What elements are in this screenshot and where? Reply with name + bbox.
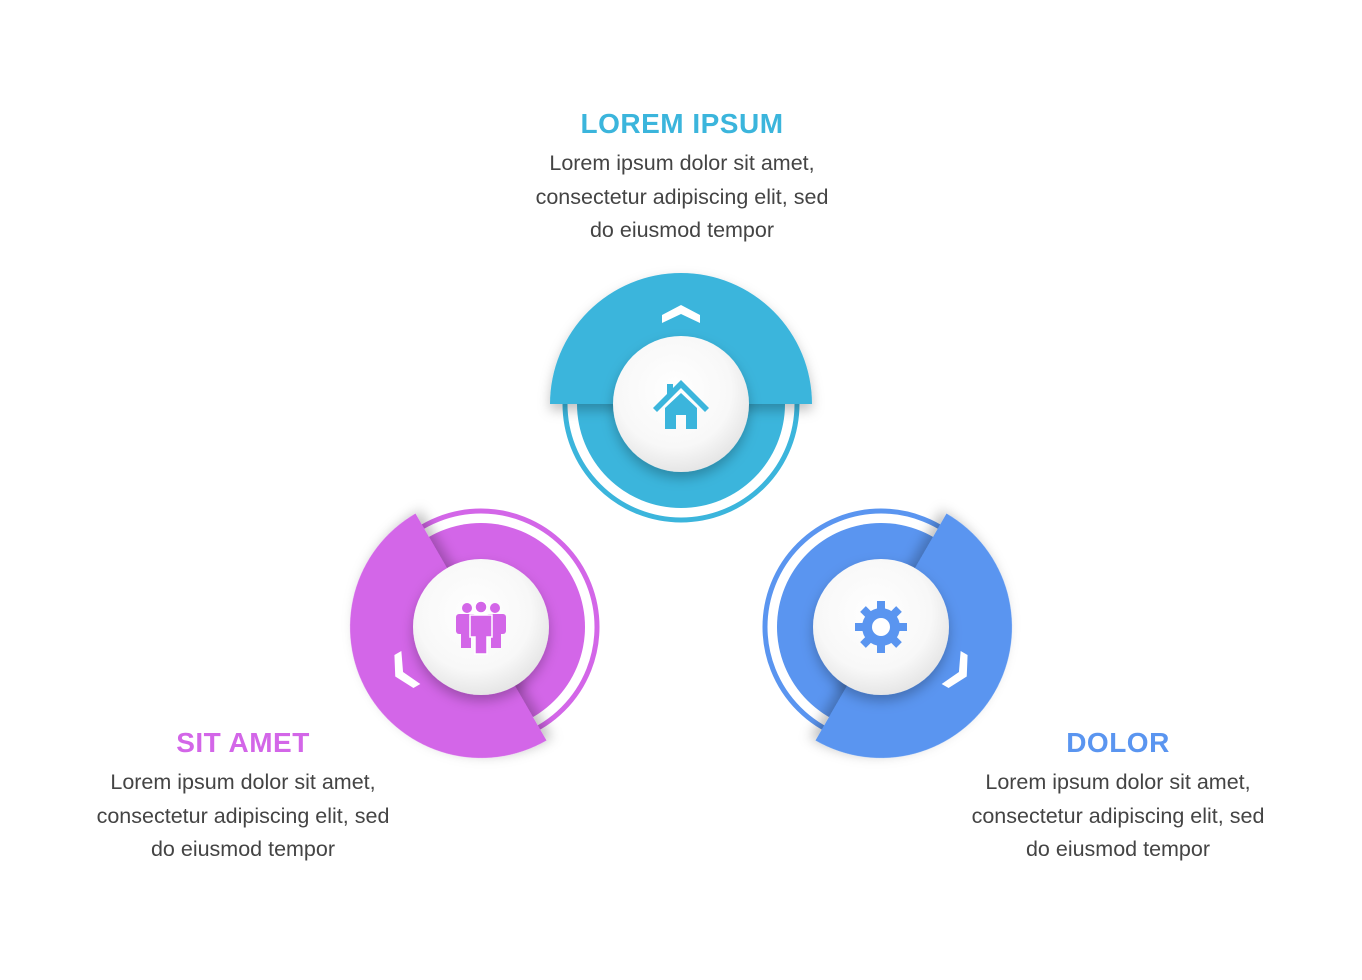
text: right <box>972 727 1264 861</box>
text: left: Lorem ipsum dolor sit amet, <box>110 770 376 794</box>
text: right: Lorem ipsum dolor sit amet, <box>985 770 1251 794</box>
icon: house <box>653 380 709 429</box>
text: top <box>536 108 828 242</box>
text: top: consectetur adipiscing elit, sed <box>536 184 828 208</box>
text: left <box>97 727 389 861</box>
circle: left <box>302 511 597 806</box>
text: right: do eiusmod tempor <box>1026 837 1210 861</box>
circle: top <box>550 273 812 520</box>
text: left: SIT AMET <box>176 727 310 758</box>
icon: people <box>456 601 506 654</box>
text: top: Lorem ipsum dolor sit amet, <box>549 151 815 175</box>
text: right: DOLOR <box>1066 727 1170 758</box>
text: right: consectetur adipiscing elit, sed <box>972 804 1264 828</box>
text: left: consectetur adipiscing elit, sed <box>97 804 389 828</box>
text: top: do eiusmod tempor <box>590 218 774 242</box>
text: left: do eiusmod tempor <box>151 837 335 861</box>
icon: gear <box>855 601 907 653</box>
circle: right <box>765 511 1060 806</box>
text: top: LOREM IPSUM <box>580 108 784 139</box>
